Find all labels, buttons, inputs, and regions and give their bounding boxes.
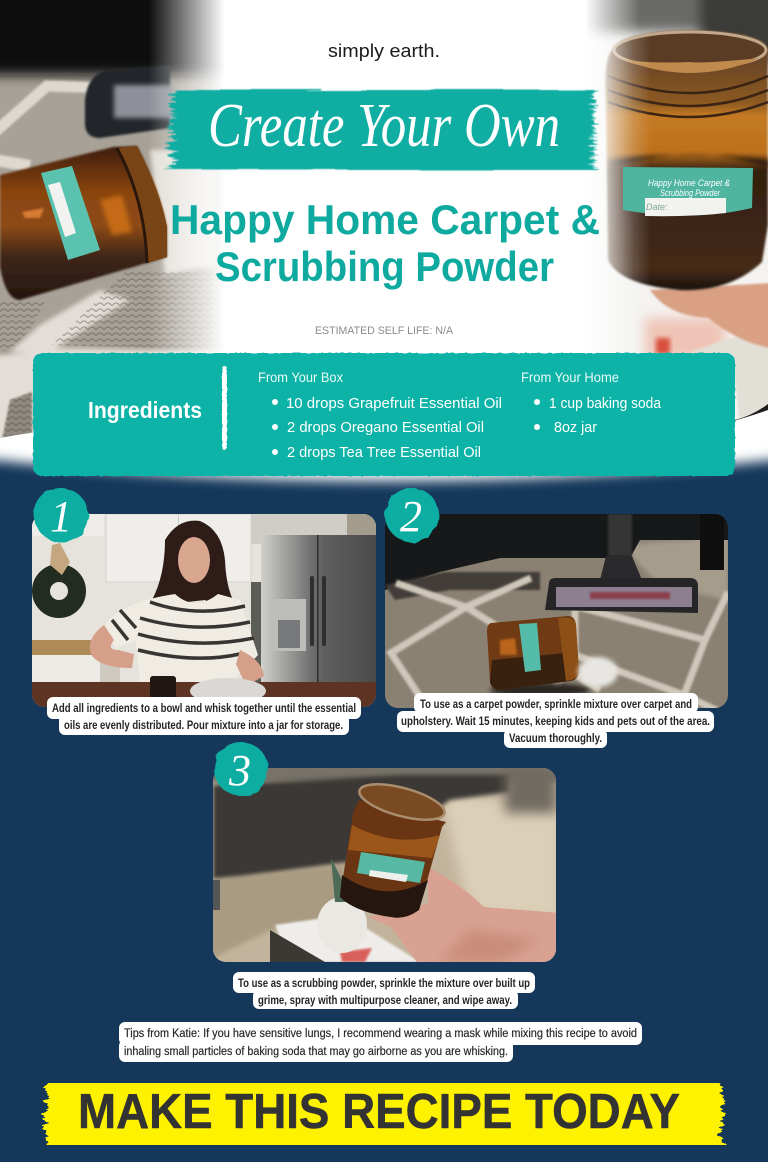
- step badge 1: [34, 488, 88, 542]
- list: from your home: [521, 370, 662, 436]
- callout: tips from katie: [119, 1022, 642, 1062]
- title: Happy Home Carpet &: [170, 196, 600, 243]
- jar label: Date:: [646, 202, 668, 212]
- title: Scrubbing Powder: [215, 243, 554, 290]
- fridge: [261, 535, 376, 682]
- photo: left carpet and jar: [0, 0, 222, 438]
- call to action banner: MAKE THIS RECIPE TODAY: [78, 1085, 680, 1139]
- woman: [152, 521, 233, 604]
- caption: step 2: upholstery. Wait 15 minutes, keeping kids and pets out of the area.: [401, 716, 710, 728]
- caption: step 2: Vacuum thoroughly.: [509, 733, 602, 745]
- jar: [340, 800, 446, 918]
- list: from your box: 2 drops Oregano Essential Oil: [287, 419, 484, 436]
- counter: [32, 640, 92, 655]
- caption: step 2: [397, 693, 714, 748]
- step badge 3: [214, 742, 268, 796]
- hero white header with photos: [0, 0, 768, 481]
- list: from your home: 1 cup baking soda: [549, 395, 662, 412]
- carpet scallop texture: [0, 272, 206, 437]
- callout: tips from katie: inhaling small particles of baking soda that may go airborne as you are whisking.: [124, 1046, 508, 1058]
- vacuum: [608, 514, 632, 556]
- caption: step 2: To use as a carpet powder, sprinkle mixture over carpet and: [420, 699, 692, 711]
- brush banner: create your own: Create Your Own: [208, 92, 560, 160]
- list: from your box: 10 drops Grapefruit Essential Oil: [286, 395, 502, 412]
- hand: [368, 867, 560, 965]
- jar: [490, 683, 590, 697]
- list: from your box: 2 drops Tea Tree Essential Oil: [287, 444, 481, 461]
- caption: step 1: oils are evenly distributed. Pour mixture into a jar for storage.: [64, 720, 343, 732]
- caption: step 3: To use as a scrubbing powder, sprinkle the mixture over built up: [238, 978, 530, 990]
- photo: right blurred background and hand: [588, 0, 768, 420]
- wreath: [41, 573, 77, 609]
- list: from your box: [258, 370, 502, 461]
- caption: step 1: [47, 697, 361, 735]
- photo: step 2 carpet and vacuum: [385, 514, 728, 708]
- jar label: [623, 167, 753, 216]
- icon: right amber jar: [605, 30, 768, 290]
- jar label: Scrubbing Powder: [660, 188, 721, 198]
- heading: ingredients: Ingredients: [88, 397, 202, 423]
- caption: step 3: grime, spray with multipurpose cleaner, and wipe away.: [258, 995, 512, 1007]
- step badge 2: [385, 488, 439, 542]
- step badge 2: 2: [400, 492, 422, 541]
- jar label: Happy Home Carpet &: [648, 178, 730, 188]
- caption: step 1: Add all ingredients to a bowl and whisk together until the essential: [52, 703, 356, 715]
- shelf life note: ESTIMATED SELF LIFE: N/A: [315, 325, 454, 337]
- logo: simply earth.: [328, 41, 440, 61]
- photo: step 3 hand holding jar: [205, 760, 565, 965]
- caption: step 3: [233, 972, 535, 1009]
- list: from your box: From Your Box: [258, 370, 343, 385]
- list: from your home: 8oz jar: [554, 419, 597, 436]
- panel: ingredients: [33, 353, 735, 476]
- step badge 1: 1: [50, 492, 72, 541]
- step badge 3: 3: [228, 746, 251, 795]
- table: [32, 682, 376, 707]
- icon: left amber jar: [0, 146, 167, 300]
- list: from your home: From Your Home: [521, 370, 619, 385]
- title: [170, 196, 600, 290]
- divider brush stroke: [222, 366, 227, 450]
- photo: step 1 kitchen: [32, 514, 376, 707]
- callout: tips from katie: Tips from Katie: If you have sensitive lungs, I recommend wearing a mask while mixing this recipe to avoid: [124, 1028, 637, 1040]
